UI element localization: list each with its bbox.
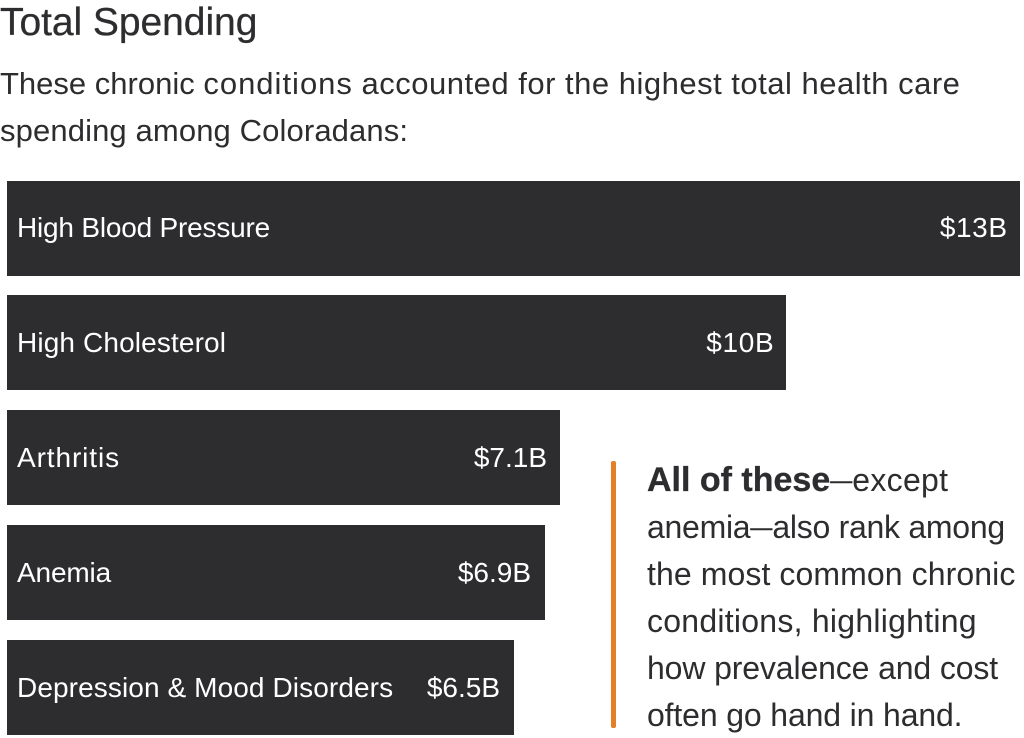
intro text	[0, 66, 960, 148]
bar: Depression & Mood Disorders: Depression & Mood Disorders	[17, 672, 393, 703]
bar: High Blood Pressure: High Blood Pressure	[17, 212, 270, 243]
callout text: anemia—also rank among	[647, 509, 1005, 545]
bar: High Cholesterol	[7, 295, 786, 390]
callout text: conditions, highlighting	[647, 603, 977, 639]
bar: Arthritis: Arthritis	[17, 442, 120, 473]
intro text: These chronic conditions accounted for the highest total health care	[0, 66, 960, 101]
bar: Depression & Mood Disorders: $6.5B	[427, 672, 500, 703]
intro text: spending among Coloradans:	[0, 113, 408, 148]
callout text	[647, 461, 1015, 733]
callout text: how prevalence and cost	[647, 650, 998, 686]
bar: Anemia: $6.9B	[458, 557, 531, 588]
bar: Arthritis: $7.1B	[474, 442, 547, 473]
bar: Anemia	[7, 525, 545, 620]
bar: High Cholesterol: High Cholesterol	[17, 327, 226, 358]
bar: High Blood Pressure: $13B	[940, 212, 1008, 243]
bar: High Cholesterol: $10B	[706, 327, 774, 358]
bar chart	[7, 181, 1020, 735]
bar: Arthritis	[7, 410, 560, 505]
callout accent line	[611, 461, 616, 728]
callout text: the most common chronic	[647, 556, 1015, 592]
callout text: All of these—except	[647, 461, 948, 499]
bar: Anemia: Anemia	[17, 557, 111, 588]
title: Total Spending	[0, 1, 257, 44]
bar: Depression & Mood Disorders	[7, 640, 514, 735]
callout text: often go hand in hand.	[647, 697, 962, 733]
bar: High Blood Pressure	[7, 181, 1020, 276]
